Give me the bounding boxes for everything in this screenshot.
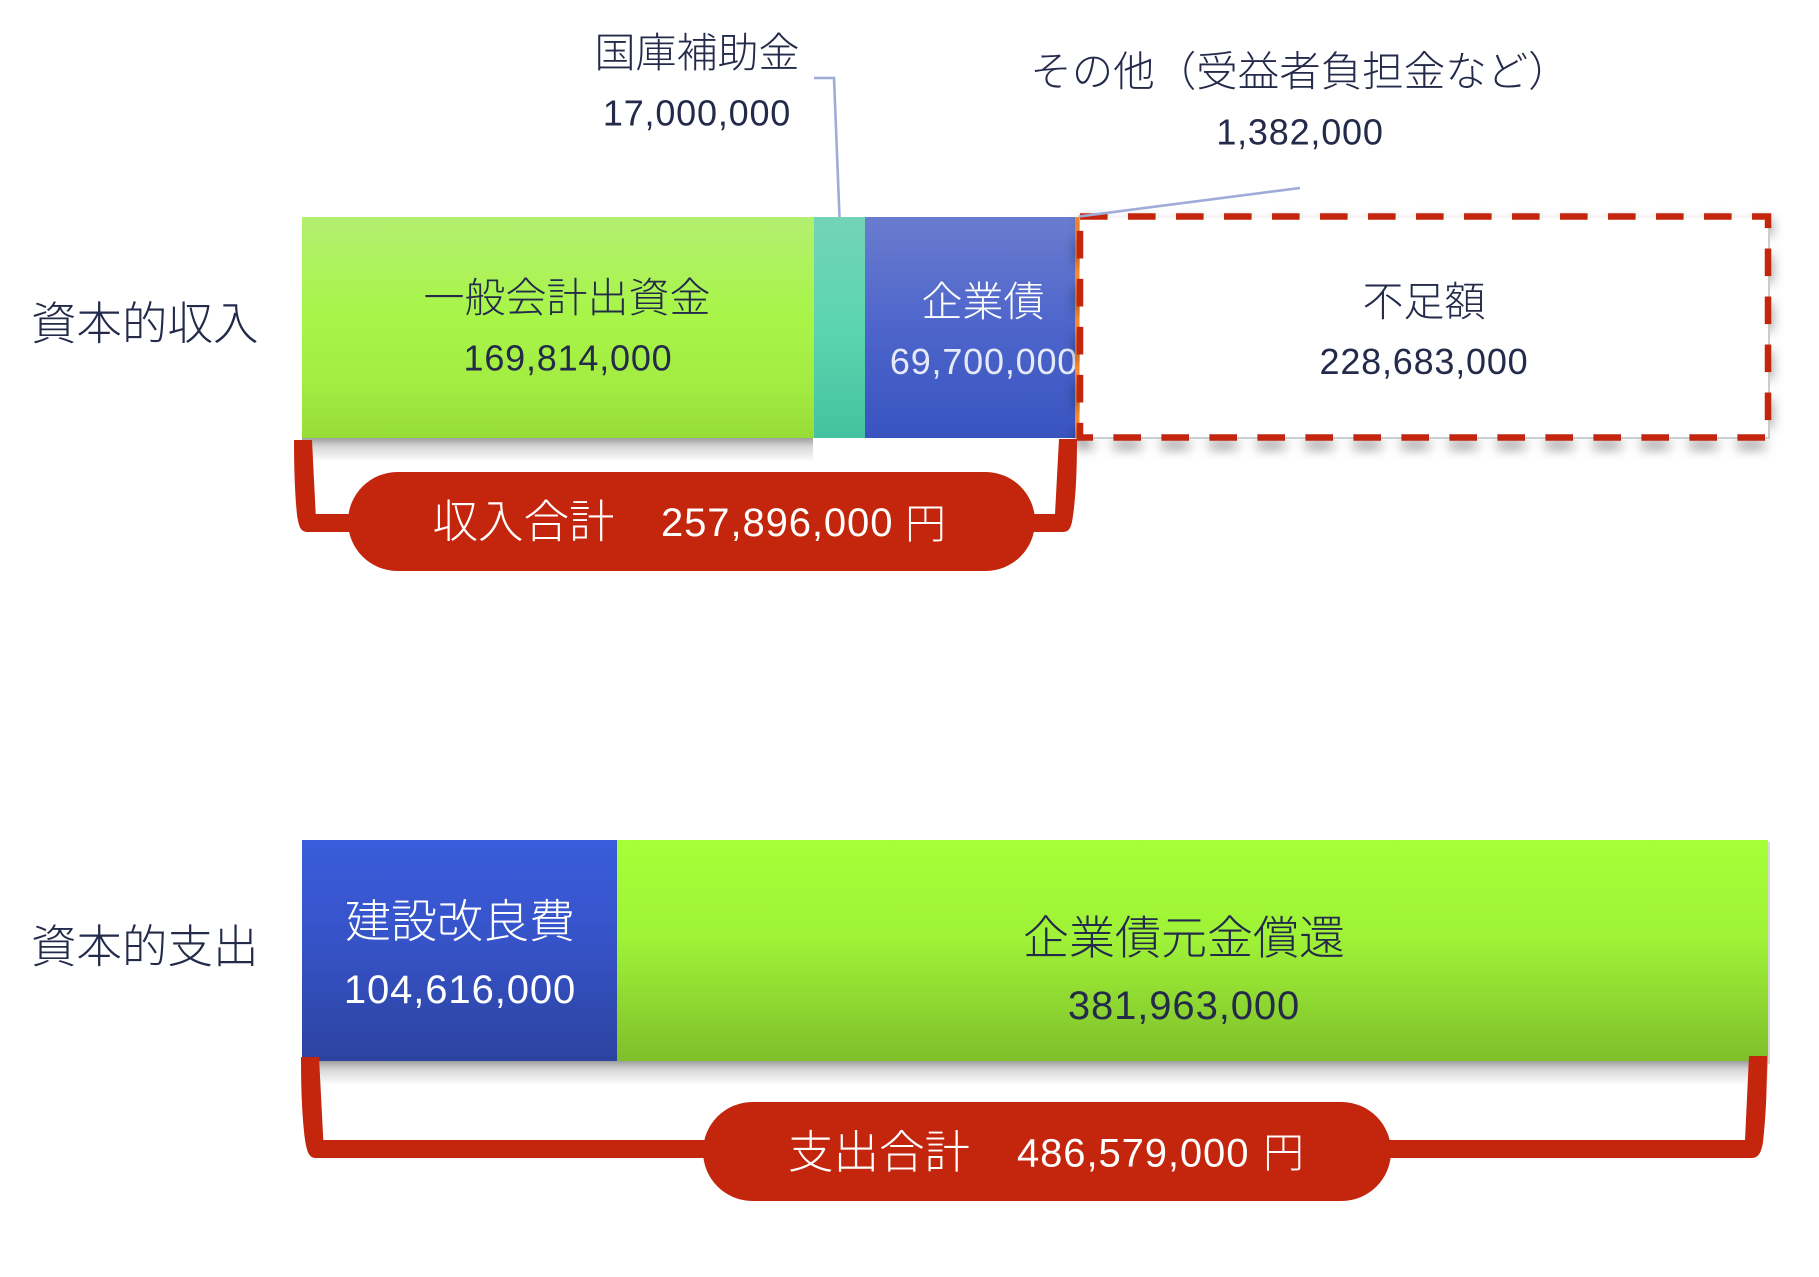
segment: bond principal redemption [617, 840, 1768, 1061]
segment: bond principal redemption: 381,963,000 [1068, 984, 1300, 1028]
segment: national subsidy [814, 217, 865, 438]
segment: other revenue [1075, 217, 1080, 438]
bracket: expenditure total [301, 1056, 1767, 1158]
callout: other revenue [1030, 48, 1570, 152]
heading: capital revenue: 資本的収入 [31, 298, 259, 350]
total pill: expenditure: 円 [1263, 1130, 1304, 1176]
total pill: revenue [348, 472, 1035, 571]
segment: shortfall [1080, 216, 1769, 444]
heading: capital expenditure: 資本的支出 [31, 922, 259, 972]
segment: shortfall: 228,683,000 [1320, 341, 1528, 382]
revenue bar [302, 216, 1769, 462]
segment: shortfall: 不足額 [1362, 279, 1486, 325]
segment: construction and improvement: 104,616,000 [344, 968, 576, 1012]
segment: general account contribution [302, 217, 814, 438]
segment: corporate bonds [865, 217, 1078, 438]
shadow: expenditure bar [302, 1061, 1768, 1085]
total pill: expenditure: 486,579,000 [1017, 1132, 1249, 1176]
total pill: expenditure: 支出合計 [788, 1127, 970, 1178]
shadow: general account segment [302, 438, 813, 462]
bracket: revenue total [294, 439, 1077, 532]
segment: general account contribution: 169,814,000 [464, 338, 672, 378]
callout leader: other revenue [1079, 188, 1300, 216]
segment: corporate bonds: 69,700,000 [890, 341, 1078, 382]
callout: national subsidy: 17,000,000 [603, 92, 791, 134]
segment: construction and improvement: 建設改良費 [345, 896, 575, 948]
total pill: revenue: 257,896,000 [661, 501, 893, 545]
total pill: expenditure [703, 1102, 1391, 1201]
callout leader: national subsidy [814, 78, 840, 217]
total pill: revenue: 円 [905, 501, 946, 547]
callout: national subsidy: 国庫補助金 [594, 30, 800, 76]
segment: construction and improvement [302, 840, 617, 1061]
segment: corporate bonds: 企業債 [922, 279, 1044, 325]
callout: other revenue: 1,382,000 [1216, 112, 1384, 152]
segment: bond principal redemption: 企業債元金償還 [1023, 912, 1345, 964]
callout: other revenue: その他（受益者負担金など） [1030, 48, 1570, 95]
segment: general account contribution: 一般会計出資金 [424, 275, 710, 321]
callout: national subsidy [594, 30, 800, 134]
bar edge shadow [1768, 842, 1770, 1064]
total pill: revenue: 収入合計 [432, 496, 615, 548]
expenditure bar [302, 840, 1770, 1085]
shadow: dashed box [1080, 224, 1768, 444]
